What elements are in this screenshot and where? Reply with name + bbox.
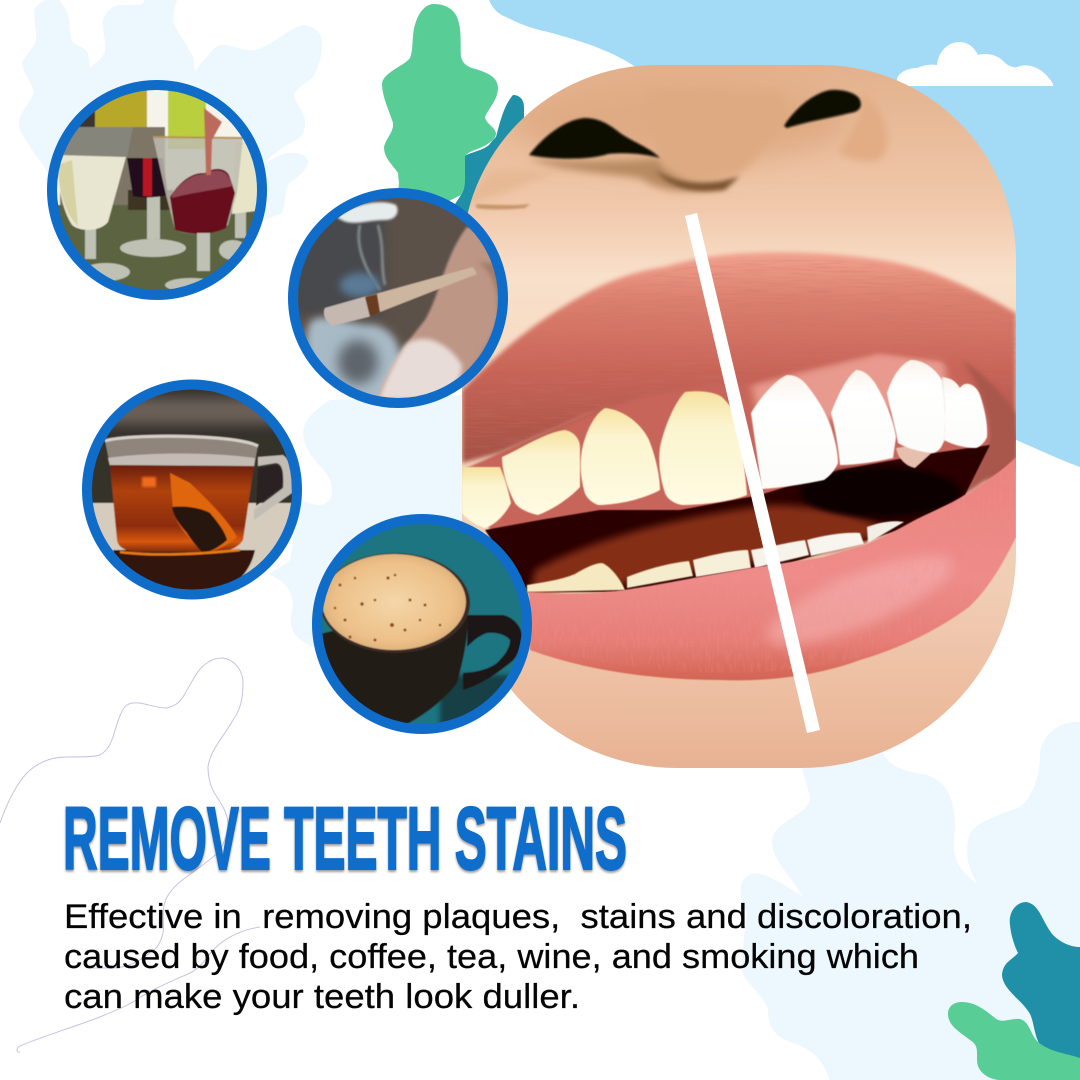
icon: cloud bbox=[897, 42, 1053, 86]
smoke backdrop bbox=[298, 198, 472, 358]
body line 2: caused by food, coffee, tea, wine, and smoking which bbox=[64, 938, 919, 976]
wine glass left bbox=[58, 127, 133, 157]
pale blob top left bbox=[19, 0, 322, 220]
lower lip bbox=[529, 457, 1016, 680]
upper lip texture bbox=[462, 259, 1016, 463]
ring bbox=[87, 384, 297, 594]
photo circle: coffee cup bbox=[315, 517, 535, 735]
leaf: teal bottom right bbox=[1002, 902, 1080, 1060]
body line 3: can make your teeth look duller. bbox=[64, 978, 580, 1016]
lower lip highlight bbox=[764, 553, 954, 649]
lower teeth bbox=[527, 521, 904, 592]
wine pour bbox=[204, 108, 222, 175]
hot spot bbox=[142, 477, 156, 487]
mouth corner bbox=[962, 360, 1016, 495]
foam bubbles bbox=[334, 574, 441, 642]
right white wine bbox=[231, 142, 257, 215]
cup handle bbox=[463, 615, 522, 690]
upper lip bbox=[462, 252, 1016, 480]
photo circle: wine glasses bbox=[50, 84, 264, 296]
icon: left nostril bbox=[529, 118, 660, 159]
decorative thin line: upper strand bbox=[0, 658, 243, 968]
mouth interior bbox=[485, 445, 990, 592]
nose shading bbox=[462, 78, 888, 210]
wine backdrop bbox=[57, 90, 244, 206]
ring bbox=[293, 193, 503, 403]
tea backdrop bbox=[92, 390, 292, 504]
ring bbox=[52, 85, 262, 295]
pale gum below right teeth bbox=[896, 440, 946, 468]
tea bag bbox=[170, 473, 237, 552]
photo circle: cigarette smoke bbox=[290, 190, 505, 405]
photo: smile before and after bbox=[462, 65, 1016, 768]
face skin bbox=[462, 65, 1016, 768]
pale gum on whitened side bbox=[751, 352, 948, 420]
glass stems and bases bbox=[82, 195, 247, 281]
glass rim bbox=[105, 435, 258, 467]
leaf: teal top bbox=[451, 95, 524, 232]
cup rim bbox=[320, 553, 470, 653]
pale blob middle bbox=[270, 395, 470, 650]
lower lip texture bbox=[584, 494, 964, 672]
white divider strip bbox=[685, 213, 820, 733]
leaf: green top bbox=[382, 4, 498, 205]
table bbox=[85, 503, 299, 598]
glass handle bbox=[254, 455, 292, 520]
tea liquid bbox=[110, 465, 254, 552]
wine glass back bbox=[127, 158, 168, 197]
ring bbox=[317, 519, 527, 729]
tongue and lower gum bbox=[530, 505, 890, 590]
coffee foam bbox=[322, 554, 466, 650]
red wine glass bbox=[153, 137, 243, 234]
dark mouth back bbox=[800, 467, 960, 517]
pale blob bottom right bbox=[741, 722, 1080, 1080]
cigarette bbox=[324, 267, 477, 312]
leaf: green bottom right bbox=[948, 1002, 1080, 1080]
gum and mouth backing bbox=[462, 345, 1016, 595]
body line 1: Effective in removing plaques, stains and discoloration, bbox=[64, 898, 972, 936]
whitened teeth (white side) bbox=[751, 360, 987, 489]
saucer light line bbox=[120, 550, 240, 554]
title: REMOVE TEETH STAINS bbox=[63, 788, 627, 888]
decorative thin line: lower strand bbox=[17, 927, 260, 1052]
smoke cloud bbox=[306, 317, 401, 405]
hand bbox=[377, 226, 498, 398]
main glass stem and base bbox=[164, 232, 211, 290]
body text bbox=[64, 898, 972, 1016]
coffee backdrop bbox=[315, 517, 530, 732]
photo circle: tea cup bbox=[85, 382, 300, 598]
icon: right nostril bbox=[784, 90, 861, 128]
stained teeth (yellow side) bbox=[462, 391, 747, 528]
sky shape top right bbox=[489, 0, 1080, 467]
smoke wisp bbox=[359, 225, 385, 290]
cup body bbox=[315, 600, 468, 732]
saucer bbox=[113, 550, 255, 597]
smoke puff top bbox=[337, 202, 398, 223]
